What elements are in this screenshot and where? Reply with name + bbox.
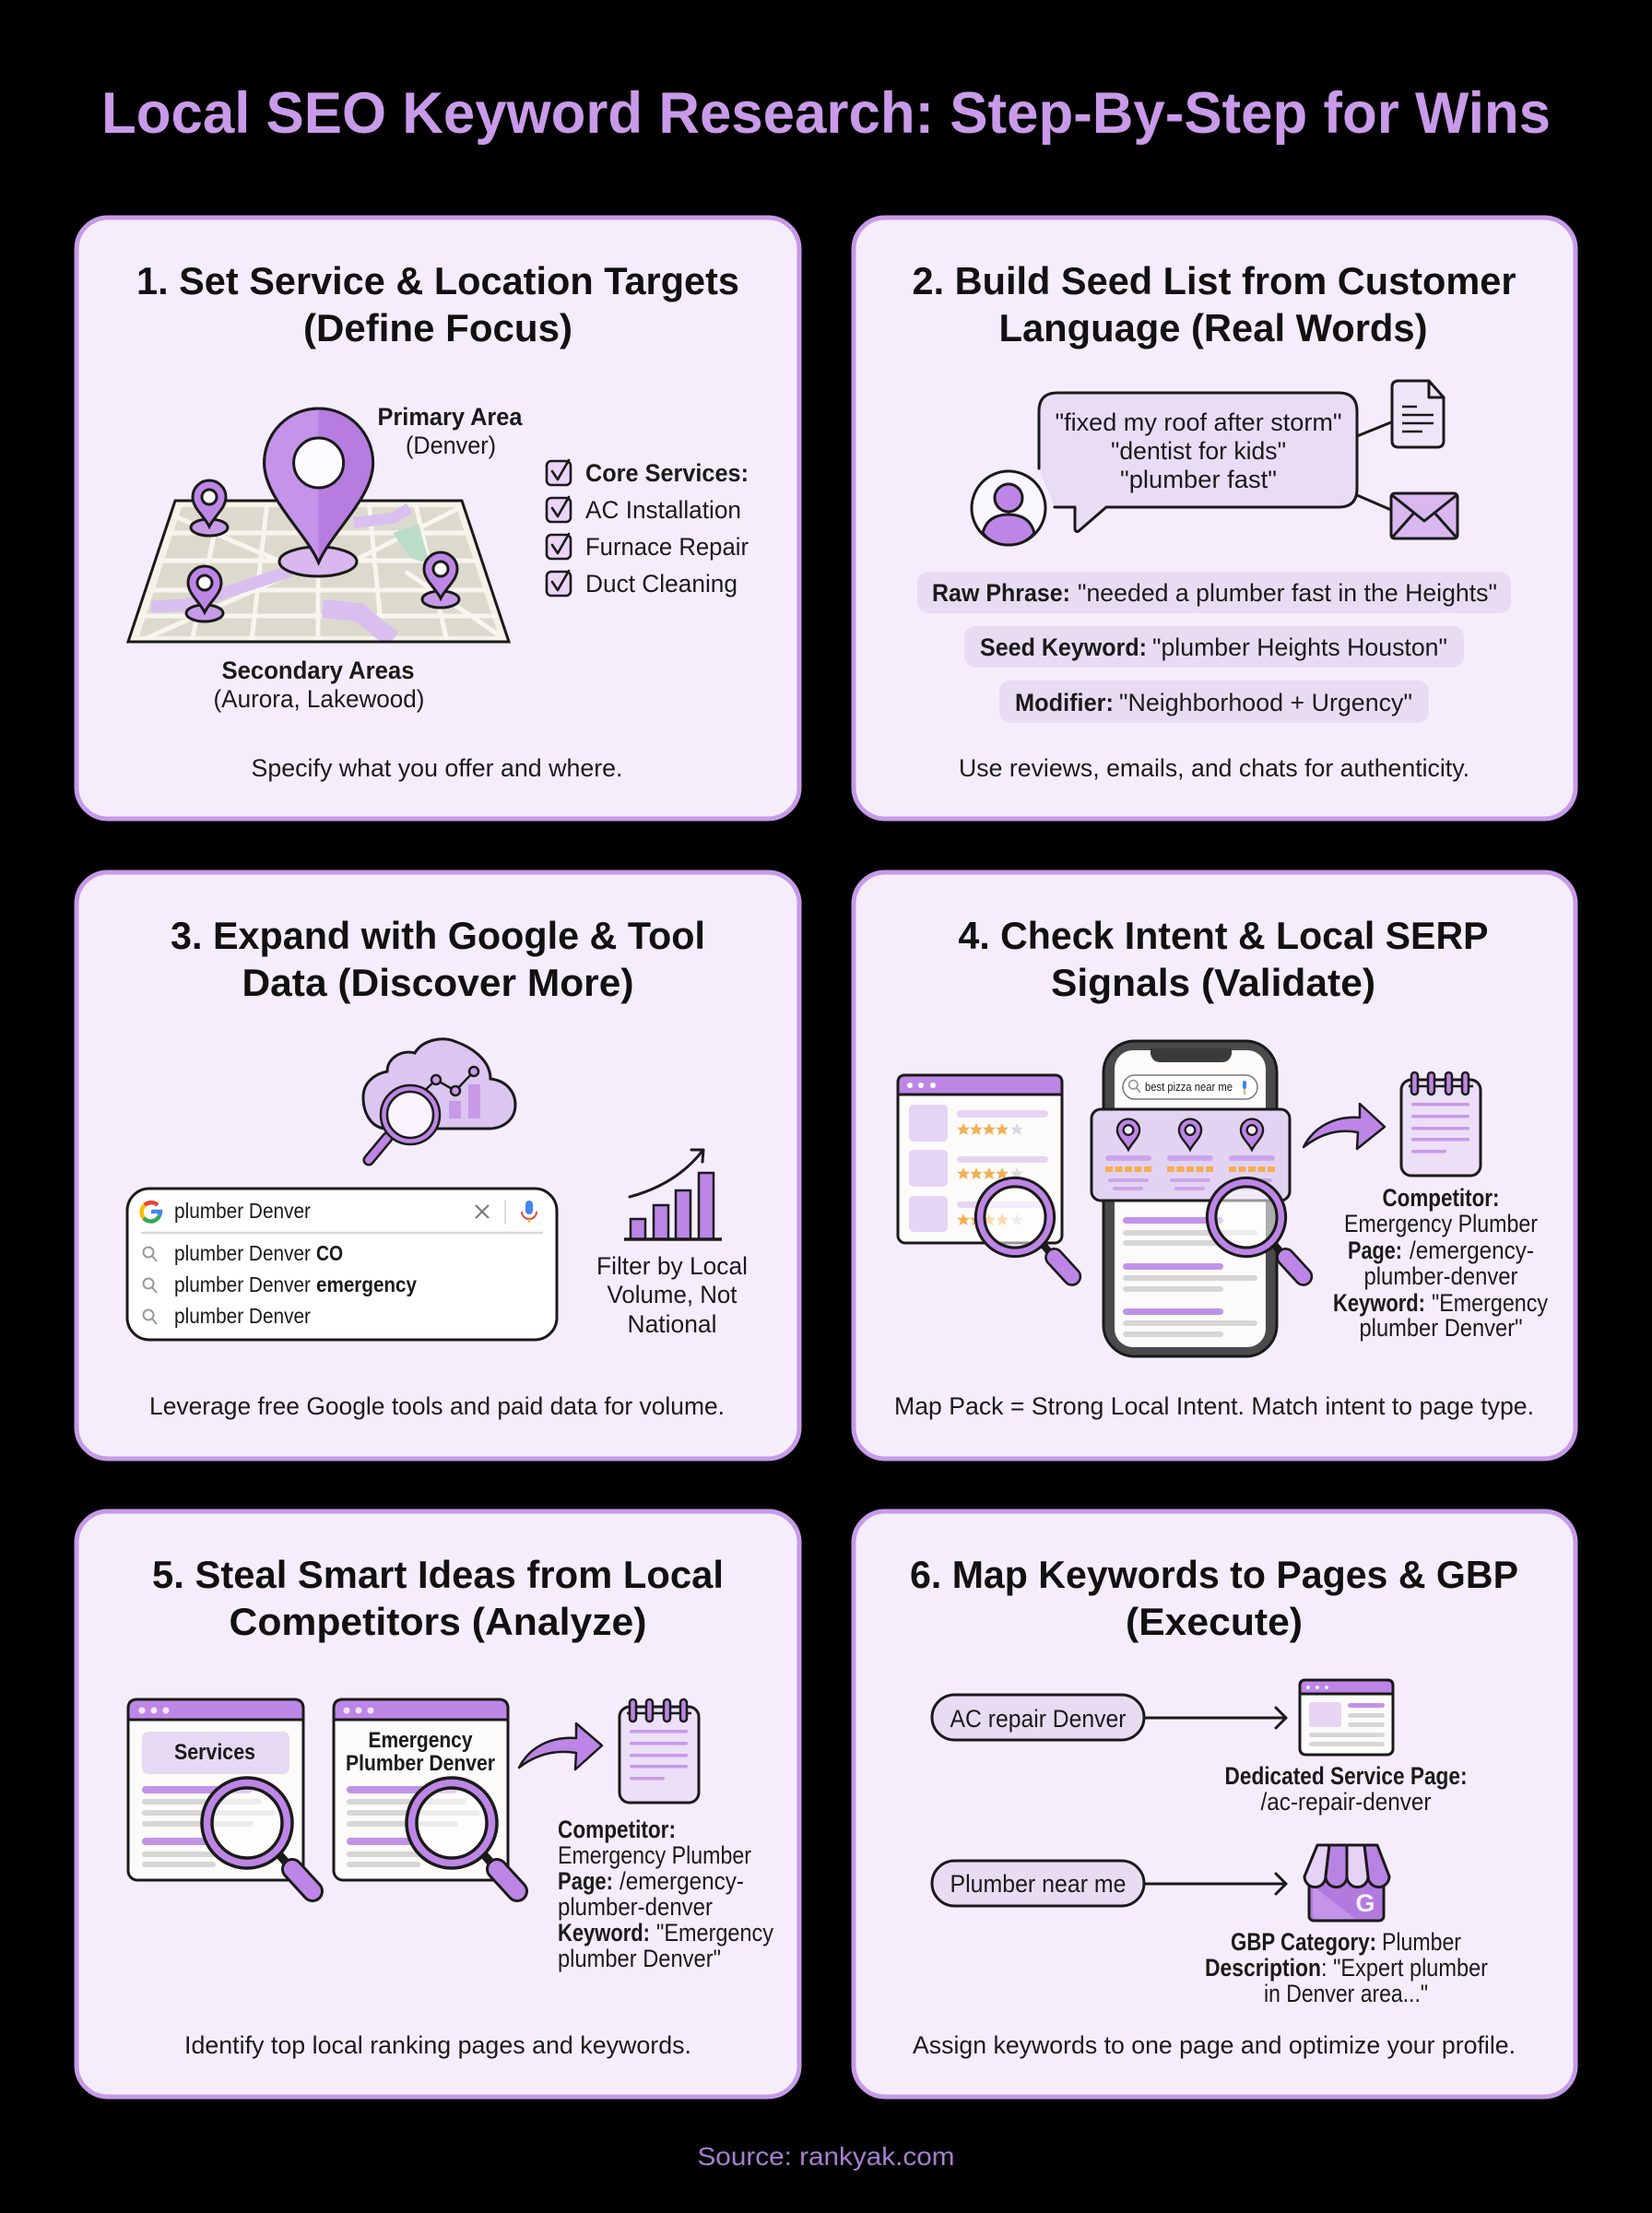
- icon: primary location pin: [265, 408, 373, 562]
- text: competitor details: Competitor:: [1383, 1184, 1499, 1212]
- browser window: services page: Services: [174, 1740, 255, 1765]
- text: GBP category and description: : "Expert plumber: [1321, 1954, 1488, 1982]
- search box with Google suggestions: [127, 1189, 557, 1340]
- browser window: emergency plumber page: [334, 1699, 508, 1880]
- heading: step 6: (Execute): [1126, 1600, 1303, 1643]
- search box with Google suggestions: plumber Denver: [174, 1241, 311, 1265]
- label: filter by local volume: National: [627, 1310, 717, 1338]
- text: competitor details: plumber Denver": [558, 1945, 721, 1972]
- panel: step 3 expand with Google and tool data: [77, 872, 799, 1459]
- icon: notepad: [1401, 1072, 1481, 1176]
- heading: step 3: 3. Expand with Google & Tool: [171, 914, 705, 957]
- text: competitor details: plumber Denver": [1359, 1314, 1523, 1342]
- speech bubble with customer phrases: "dentist for kids": [1111, 437, 1286, 465]
- icon: Google Business Profile storefront: G: [1355, 1889, 1375, 1917]
- heading: step 5: 5. Steal Smart Ideas from Local: [152, 1553, 724, 1596]
- heading: step 4: 4. Check Intent & Local SERP: [959, 914, 1488, 957]
- icon: magnifier on cloud: [369, 1085, 440, 1160]
- browser window: emergency plumber page: Plumber Denver: [346, 1751, 495, 1776]
- text: competitor details: Keyword:: [1333, 1289, 1425, 1317]
- caption: step 6: Assign keywords to one page and optimize your profile.: [913, 2031, 1516, 2059]
- icon: magnifier on phone: [1207, 1178, 1304, 1276]
- icon: envelope: [1357, 493, 1457, 538]
- pill: AC repair Denver: AC repair Denver: [950, 1705, 1127, 1733]
- text: competitor details: plumber-denver: [1364, 1262, 1518, 1290]
- heading: step 4: [959, 914, 1488, 1004]
- icon: microphone: [522, 1201, 537, 1223]
- text: competitor details: /emergency-: [1410, 1237, 1534, 1264]
- search box with Google suggestions: plumber Denver: [174, 1304, 311, 1328]
- text: competitor details: Keyword:: [558, 1919, 650, 1947]
- label: filter by local volume: [596, 1252, 748, 1338]
- heading: step 6: [910, 1553, 1518, 1643]
- text: GBP category and description: [1205, 1928, 1488, 2007]
- icon: magnifier on emergency page: [407, 1778, 517, 1891]
- pill: raw phrase: "needed a plumber fast in the Heights": [1078, 579, 1497, 607]
- map pack card: [1092, 1109, 1290, 1201]
- text: competitor details: /emergency-: [620, 1867, 744, 1895]
- text: competitor details: "Emergency: [656, 1919, 773, 1947]
- map illustration with pins: [128, 408, 509, 642]
- caption: step 5: Identify top local ranking pages and keywords.: [184, 2031, 691, 2059]
- icon: magnifier on browser: [975, 1178, 1072, 1276]
- heading: step 1: 1. Set Service & Location Targets: [136, 259, 739, 302]
- search box with Google suggestions: plumber Denver: [174, 1199, 311, 1223]
- text: competitor details: plumber-denver: [558, 1893, 713, 1921]
- search box with Google suggestions: emergency: [316, 1272, 417, 1296]
- title: Local SEO Keyword Research: Step-By-Step for Wins: [101, 81, 1551, 146]
- speech bubble with customer phrases: "fixed my roof after storm": [1055, 408, 1342, 436]
- caption: step 3: Leverage free Google tools and paid data for volume.: [149, 1392, 725, 1420]
- pill: raw phrase: [917, 572, 1511, 613]
- text: GBP category and description: Plumber: [1382, 1928, 1461, 1956]
- pill: modifier: [999, 680, 1429, 723]
- icon: Google G: [142, 1202, 160, 1222]
- arrow: to notepad: [1304, 1104, 1385, 1149]
- caption: step 1: Specify what you offer and where.: [251, 754, 623, 782]
- icon: Google Business Profile storefront: [1304, 1845, 1389, 1921]
- label: filter by local volume: Filter by Local: [596, 1252, 748, 1280]
- label: secondary areas: [214, 657, 424, 713]
- caption: step 2: Use reviews, emails, and chats for authenticity.: [959, 754, 1469, 782]
- heading: step 3: Data (Discover More): [242, 961, 634, 1004]
- checklist: core services: Furnace Repair: [585, 533, 749, 561]
- text: competitor details: [558, 1816, 773, 1972]
- checklist: core services: AC Installation: [585, 496, 741, 524]
- pill: raw phrase: Raw Phrase:: [932, 579, 1070, 607]
- text: competitor details: Emergency Plumber: [558, 1841, 751, 1869]
- text: competitor details: Competitor:: [558, 1816, 676, 1843]
- panel: step 5 steal smart ideas from competitors: [77, 1511, 799, 2097]
- pill: seed keyword: "plumber Heights Houston": [1152, 633, 1447, 661]
- search box with Google suggestions: plumber Denver: [174, 1272, 311, 1296]
- arrow: to notepad: [519, 1723, 602, 1769]
- pill: seed keyword: [964, 626, 1464, 668]
- pill: modifier: "Neighborhood + Urgency": [1119, 689, 1412, 716]
- speech bubble with customer phrases: "plumber fast": [1120, 466, 1277, 493]
- label: primary area: Primary Area: [378, 403, 523, 431]
- checklist: core services: [547, 459, 749, 598]
- text: competitor details: Page:: [1348, 1237, 1402, 1264]
- speech bubble with customer phrases: [1039, 393, 1357, 531]
- heading: step 4: Signals (Validate): [1051, 961, 1375, 1004]
- heading: step 2: 2. Build Seed List from Customer: [913, 259, 1516, 302]
- text: competitor details: [1333, 1184, 1548, 1342]
- heading: step 6: 6. Map Keywords to Pages & GBP: [910, 1553, 1518, 1596]
- label: dedicated service page: Dedicated Service Page:: [1224, 1762, 1468, 1790]
- panel: step 2 build seed list: [854, 218, 1575, 819]
- label: secondary areas: Secondary Areas: [221, 657, 415, 684]
- icon: notepad: [620, 1699, 699, 1803]
- pill: modifier: Modifier:: [1015, 689, 1114, 716]
- browser window: emergency plumber page: Emergency: [369, 1728, 473, 1753]
- phone with search results: [1103, 1041, 1277, 1356]
- text: competitor details: Emergency Plumber: [1344, 1210, 1538, 1237]
- icon: cloud with analytics and magnifier: [363, 1039, 515, 1160]
- icon: secondary pin east: [422, 552, 459, 608]
- label: primary area: (Denver): [406, 432, 496, 459]
- text: GBP category and description: in Denver area...": [1264, 1980, 1428, 2007]
- pill: AC repair Denver: [932, 1695, 1144, 1740]
- text: GBP category and description: GBP Category:: [1231, 1928, 1376, 1956]
- arrow: keyword to GBP: [1144, 1874, 1286, 1894]
- pill: plumber near me: Plumber near me: [950, 1870, 1127, 1898]
- icon: document: [1357, 381, 1444, 447]
- search box with Google suggestions: CO: [316, 1241, 343, 1265]
- panel: step 1 set service and location targets: [77, 218, 799, 819]
- icon: customer avatar: [972, 471, 1045, 545]
- icon: secondary pin north-west: [191, 480, 228, 536]
- heading: step 2: Language (Real Words): [999, 306, 1427, 349]
- browser window: services page: [128, 1699, 303, 1880]
- caption: step 4: Map Pack = Strong Local Intent. Match intent to page type.: [894, 1392, 1534, 1420]
- heading: step 1: [136, 259, 739, 349]
- arrow: keyword to service page: [1144, 1708, 1286, 1728]
- label: dedicated service page: /ac-repair-denver: [1261, 1788, 1431, 1816]
- panel: step 4 check intent and local SERP signals: [854, 872, 1575, 1459]
- footer source: Source: rankyak.com: [697, 2142, 955, 2171]
- browser window with star ratings: [898, 1075, 1062, 1243]
- heading: step 5: [152, 1553, 724, 1643]
- icon: magnifier on services page: [202, 1778, 313, 1891]
- pill: seed keyword: Seed Keyword:: [980, 633, 1147, 661]
- checklist: core services: Duct Cleaning: [585, 570, 738, 598]
- heading: step 5: Competitors (Analyze): [229, 1600, 647, 1643]
- label: secondary areas: (Aurora, Lakewood): [214, 685, 424, 713]
- panel: step 6 map keywords to pages and GBP: [854, 1511, 1575, 2097]
- pill: plumber near me: [932, 1861, 1144, 1906]
- phone with search results: best pizza near me: [1145, 1080, 1233, 1094]
- chart: rising bars with arrow: [624, 1150, 722, 1239]
- icon: service page window: [1300, 1680, 1393, 1755]
- label: dedicated service page: [1224, 1762, 1468, 1816]
- heading: step 1: (Define Focus): [303, 306, 572, 349]
- heading: step 2: [913, 259, 1516, 349]
- text: competitor details: "Emergency: [1432, 1289, 1548, 1317]
- label: primary area: [378, 403, 523, 459]
- icon: secondary pin south-west: [186, 566, 223, 621]
- label: filter by local volume: Volume, Not: [607, 1281, 738, 1308]
- heading: step 3: [171, 914, 705, 1004]
- text: GBP category and description: Description: [1205, 1954, 1321, 1982]
- text: competitor details: Page:: [558, 1867, 613, 1895]
- checklist: core services: Core Services:: [585, 459, 749, 487]
